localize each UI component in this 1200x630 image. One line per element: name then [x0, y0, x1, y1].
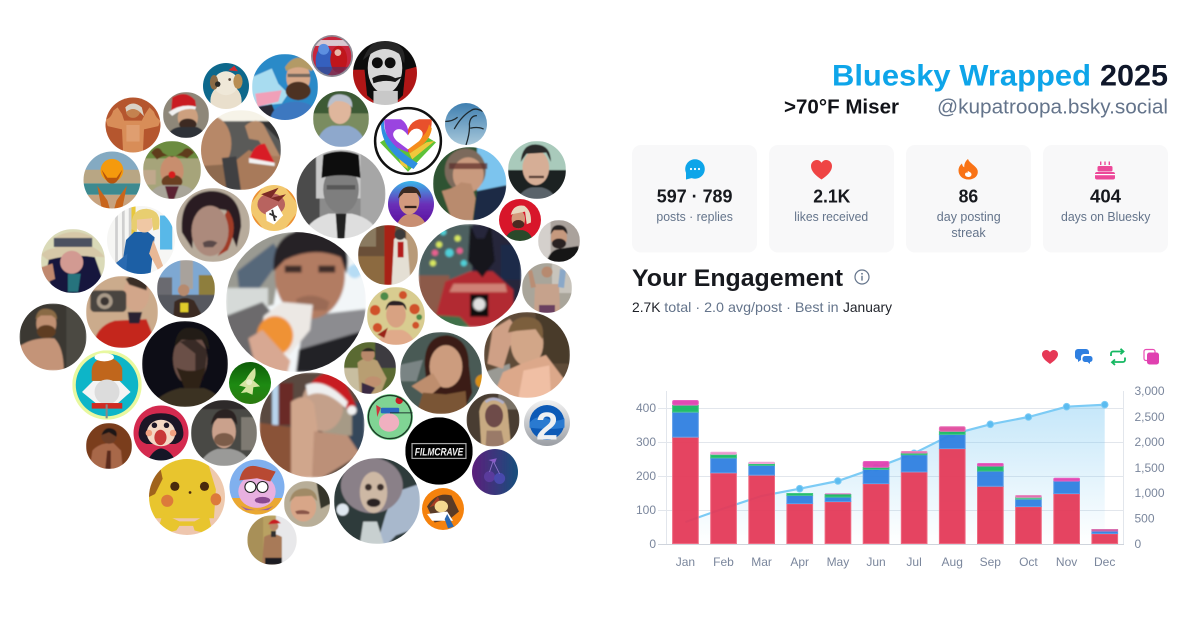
bar: Sep — [978, 464, 1003, 544]
stacked bars — [673, 400, 1118, 544]
chart legend — [1042, 349, 1159, 365]
month labels: May — [827, 555, 849, 569]
avatar: filmcrave logo: FILMCRAVE — [415, 447, 464, 459]
stat label: day posting — [937, 210, 1001, 224]
avatar: pikachu — [149, 459, 225, 535]
right axis labels: 0 — [1134, 537, 1142, 551]
avatar: rainbow heart logo — [373, 106, 443, 176]
icon: quotes legend — [1144, 350, 1159, 364]
month labels — [676, 555, 1115, 569]
panel: posting streak — [906, 145, 1031, 252]
avatar: dog in santa hat — [203, 63, 249, 109]
bar: Jul — [901, 452, 927, 544]
avatar: man in santa hat on red — [499, 199, 541, 241]
right axis labels: 1,500 — [1134, 461, 1165, 475]
stat label: likes received — [794, 210, 868, 224]
avatar: channel 2 logo — [524, 400, 570, 449]
stat label line 2: streak — [951, 226, 986, 240]
bar: Jun — [863, 462, 889, 544]
avatar: woman with long dark hair — [400, 332, 489, 414]
avatar: cartoon with red hair on stripes — [251, 185, 297, 231]
left axis labels: 100 — [636, 503, 656, 517]
avatar: young man close-up — [284, 481, 330, 527]
avatar: arm flex selfie with santa hat — [193, 110, 281, 190]
avatar: George Takei style portrait — [313, 91, 369, 147]
avatar: smiling man in santa hat — [163, 92, 209, 138]
bar: Dec — [1092, 530, 1118, 544]
right axis labels: 2,000 — [1134, 435, 1165, 449]
month labels: Feb — [713, 555, 734, 569]
month labels: Aug — [942, 555, 963, 569]
avatar: skull with wild grey hair — [334, 458, 420, 544]
avatar: dark bearded animated character — [142, 321, 228, 407]
avatar: cartoon man on purple gradient — [388, 181, 434, 227]
avatar: woman with glasses covering nose — [433, 147, 506, 220]
avatar: channel 2 logo: 2 — [536, 406, 558, 449]
icon: likes legend — [1042, 350, 1058, 364]
left axis labels: 400 — [636, 401, 656, 415]
stat label: posts · replies — [656, 210, 733, 224]
icon: reposts legend — [1111, 349, 1125, 365]
icon: heart — [811, 160, 832, 180]
bar: Mar — [749, 462, 774, 544]
stat value: 404 — [1090, 186, 1122, 206]
engagement chart — [636, 384, 1165, 569]
avatar: painted moustache portrait — [353, 40, 417, 105]
avatar: mirror selfie in santa hat — [247, 515, 297, 565]
right axis labels: 500 — [1134, 512, 1155, 526]
avatar: tree branches and blue sky — [445, 103, 487, 145]
avatar: bearded man with cap — [252, 54, 318, 120]
avatar: cartoon on cyan with pale ring — [72, 350, 142, 420]
avatar: surprised cartoon girl on red — [134, 406, 188, 460]
avatar: large selfie with cup — [226, 229, 366, 372]
engagement summary — [632, 299, 892, 315]
engagement summary: total · 2.0 avg/post · Best in — [664, 299, 839, 315]
avatar: man in tank top with hand in hair — [484, 312, 570, 398]
month labels: Jul — [906, 555, 922, 569]
bar: Apr — [787, 494, 813, 544]
avatar: smiling man in grey tee — [191, 400, 257, 466]
avatar: man in santa hat biting fist — [260, 372, 364, 478]
avatar: pink moogle on green — [367, 394, 413, 440]
month labels: Jun — [866, 555, 886, 569]
avatar: comic couple badge — [311, 35, 353, 77]
panel: days on Bluesky — [1043, 145, 1168, 252]
avatar: pink cartoon with cap — [230, 460, 284, 514]
avatar: man on city street — [157, 260, 215, 318]
avatar: orange circle with hands over beach — [84, 152, 140, 208]
avatar: shirtless bearded man with glasses — [20, 304, 86, 370]
month labels: Jan — [676, 555, 695, 569]
avatar: man's bare back — [86, 423, 132, 469]
avatar: green celebi sprite — [229, 362, 271, 404]
stat label: days on Bluesky — [1061, 210, 1151, 224]
left axis labels: 200 — [636, 469, 656, 483]
left axis labels: 0 — [649, 537, 656, 551]
month labels: Dec — [1094, 555, 1115, 569]
cumulative line — [685, 401, 1108, 522]
panel: likes received — [769, 145, 894, 252]
avatar: purple cherries — [472, 449, 518, 495]
right axis labels — [1134, 384, 1165, 551]
panel: posts and replies — [632, 145, 757, 252]
avatar: wolf mask and christmas sweater — [418, 224, 522, 327]
bar: Jan — [673, 400, 698, 544]
avatar: orange cartoon duck — [422, 488, 464, 530]
avatar: blonde comic woman in blue dress — [107, 206, 175, 274]
avatar: shirtless mirror selfie — [522, 263, 572, 313]
left axis labels: 300 — [636, 435, 656, 449]
avatar cluster — [20, 35, 580, 565]
bar: Feb — [711, 452, 736, 544]
heading: your engagement: Your Engagement — [632, 265, 843, 292]
avatar: man in red hoodie with camera phone — [86, 275, 158, 348]
month labels: Oct — [1019, 555, 1038, 569]
stat value: 86 — [959, 186, 978, 206]
stat value: 2.1K — [813, 186, 851, 206]
cumulative area — [685, 405, 1105, 544]
right axis labels: 1,000 — [1134, 486, 1165, 500]
display name: >70°F Miser — [784, 96, 899, 118]
avatar: black and white portrait with peci — [296, 150, 386, 238]
icon: info — [855, 270, 869, 284]
avatar: filmcrave logo — [405, 417, 473, 485]
avatar: dark haired man with beard — [538, 220, 580, 262]
title: 2025 — [1100, 60, 1168, 92]
avatar: person with red streaked hair — [176, 188, 250, 262]
icon: birthday cake — [1095, 162, 1115, 180]
avatar: woman in low light with tiara — [466, 394, 520, 446]
right axis labels: 2,500 — [1134, 410, 1165, 424]
bar: Nov — [1054, 478, 1080, 544]
stat value: 597 · 789 — [657, 186, 732, 206]
engagement summary: 2.7K — [632, 299, 661, 315]
left axis labels — [636, 401, 656, 551]
avatar: man with moustache and headset — [508, 141, 566, 199]
title: Bluesky Wrapped — [832, 60, 1091, 92]
avatar: man with floral background — [367, 287, 425, 345]
bar: May — [825, 494, 851, 544]
avatar: woman in wide brimmed hat — [41, 229, 105, 293]
avatar: man in patterned shirt sitting — [344, 342, 396, 394]
bar: Aug — [939, 427, 965, 544]
bar: Oct — [1016, 496, 1041, 544]
icon: chat bubble — [685, 159, 705, 180]
avatar: flexing muscle man in santa hat — [106, 98, 160, 152]
right axis labels: 3,000 — [1134, 384, 1165, 398]
month labels: Mar — [751, 555, 772, 569]
month labels: Nov — [1056, 555, 1077, 569]
handle: @kupatroopa.bsky.social — [937, 96, 1168, 118]
icon: flame — [958, 159, 978, 180]
engagement summary: January — [843, 299, 892, 315]
avatar: knight costume in shop — [358, 225, 418, 285]
month labels: Apr — [790, 555, 809, 569]
icon: replies legend — [1075, 349, 1092, 364]
month labels: Sep — [980, 555, 1001, 569]
avatar: man with reindeer antlers and red nose — [143, 141, 201, 199]
